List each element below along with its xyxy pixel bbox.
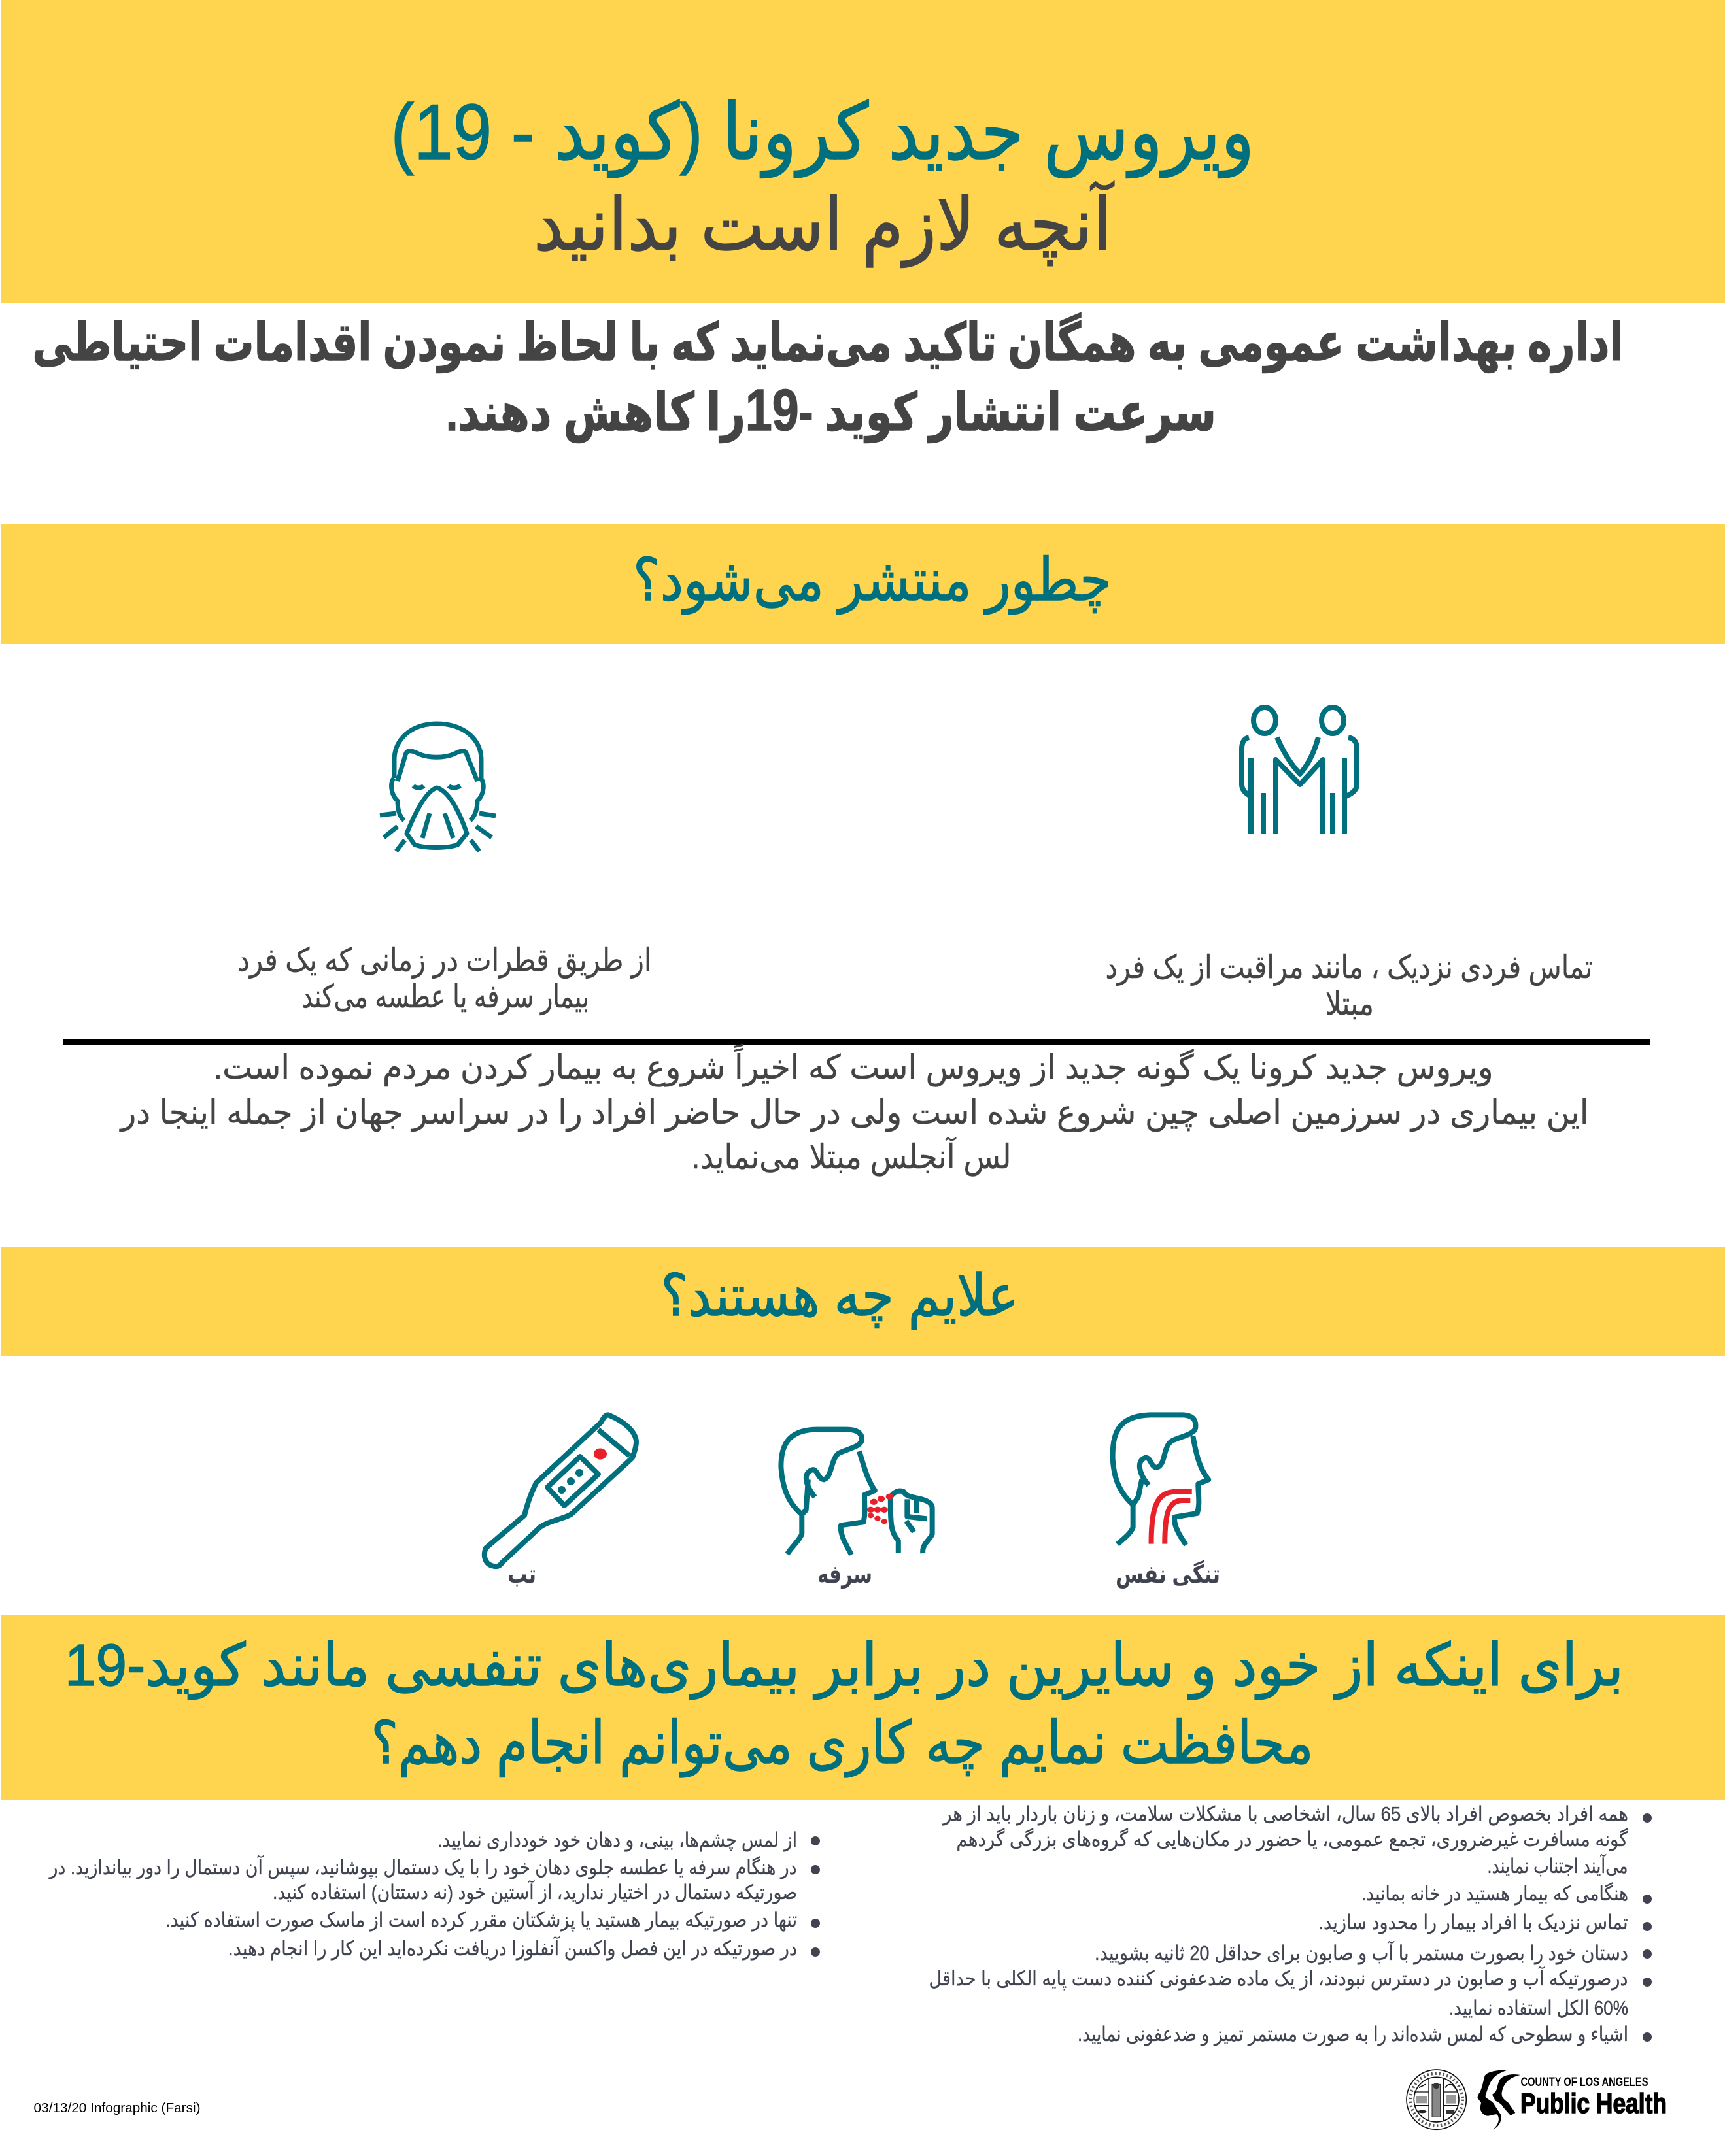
list: prevention tips right: تماس نزدیک با افراد بیمار را محدود سازید. (1318, 1911, 1628, 1934)
icon: thermometer (485, 1415, 636, 1566)
list: prevention tips right: هنگامی که بیمار هستید در خانه بمانید. (1361, 1882, 1628, 1906)
text block: about the virus: این بیماری در سرزمین اصلی چین شروع شده است ولی در حال حاضر افراد را در سراسر جهان از جمله اینجا در (119, 1094, 1588, 1132)
list: prevention tips left: از لمس چشم‌ها، بینی، و دهان خود خودداری نمایید. (437, 1828, 797, 1852)
list: prevention tips left: در هنگام سرفه یا عطسه جلوی دهان خود را با یک دستمال بپوشانید، سپس آن دستمال را دور بیاندازید. در (48, 1855, 797, 1879)
list: prevention tips left: در صورتیکه در این فصل واکسن آنفلوزا دریافت نکرده‌اید این کار را انجام دهید. (228, 1936, 797, 1961)
logo: wordmark (1520, 2076, 1667, 2119)
list: prevention tips right: گونه مسافرت غیرضروری، تجمع عمومی، یا حضور در مکان‌هایی که گروه‌های بزرگی گردهم (956, 1828, 1628, 1851)
list: prevention tips left: صورتیکه دستمال در اختیار ندارید، از آستین خود (نه دستتان) استفاده کنید. (273, 1879, 797, 1904)
list: prevention tips right: دستان خود را بصورت مستمر با آب و صابون برای حداقل 20 ثانیه بشویید. (1095, 1940, 1628, 1965)
panel: how does it spread heading: چطور منتشر می‌شود؟ (633, 548, 1112, 615)
caption: droplets: از طریق قطرات در زمانی که یک فرد (238, 943, 651, 979)
panel: how to protect heading: برای اینکه از خود و سایرین در برابر بیماری‌های تنفسی مانند کوید-19 (65, 1633, 1624, 1700)
footer date note: 03/13/20 Infographic (Farsi) (34, 2101, 200, 2115)
panel: symptoms heading: علایم چه هستند؟ (660, 1263, 1019, 1329)
icon: person coughing (781, 1430, 932, 1555)
label: cough: سرفه (817, 1561, 872, 1589)
list: prevention tips right: اشیاء و سطوحی که لمس شده‌اند را به صورت مستمر تمیز و ضدعفونی نمایید. (1078, 2023, 1628, 2046)
logo: wordmark: Public Health (1520, 2088, 1667, 2119)
list: prevention tips left: تنها در صورتیکه بیمار هستید یا پزشکتان مقرر کرده است از ماسک صورت استفاده کنید. (165, 1908, 797, 1932)
caption: close contact: مبتلا (1325, 986, 1374, 1022)
text block: about the virus: ویروس جدید کرونا یک گونه جدید از ویروس است که اخیراً شروع به بیمار کردن مردم نموده است. (213, 1043, 1494, 1087)
lead statement (33, 312, 1623, 443)
list: prevention tips left (48, 1828, 820, 1961)
logo: silhouette (1478, 2070, 1520, 2129)
logo: county seal (1407, 2070, 1466, 2129)
list: prevention tips right: می‌آیند اجتناب نمایند. (1487, 1853, 1628, 1878)
panel: title banner (1, 0, 1725, 303)
caption: close contact: تماس فردی نزدیک ، مانند مراقبت از یک فرد (1105, 950, 1593, 986)
panel: how to protect heading (1, 1615, 1725, 1800)
panel: how does it spread heading (1, 524, 1725, 644)
logo: wordmark: COUNTY OF LOS ANGELES (1521, 2076, 1648, 2089)
title line 2: آنچه لازم است بدانید (534, 180, 1115, 267)
label: fever: تب (507, 1561, 536, 1589)
caption: close contact (1105, 950, 1593, 1022)
icon: person sneezing with mask (380, 724, 496, 851)
caption: droplets: بیمار سرفه یا عطسه می‌کند (301, 979, 589, 1015)
icon: person short of breath (1113, 1415, 1208, 1545)
panel: how to protect heading: محافظت نمایم چه کاری می‌توانم انجام دهم؟ (371, 1711, 1313, 1777)
icon: two people holding hands (1242, 707, 1357, 834)
panel: symptoms heading (1, 1247, 1725, 1356)
divider rule (63, 1039, 1650, 1045)
text block: about the virus (119, 1043, 1588, 1176)
list: prevention tips right (929, 1802, 1652, 2046)
lead statement: سرعت انتشار کوید -19را کاهش دهند. (446, 378, 1216, 443)
list: prevention tips right: 60% الکل استفاده نمایید. (1449, 1996, 1628, 2019)
label: shortness of breath: تنگی نفس (1116, 1560, 1220, 1589)
caption: droplets (238, 943, 651, 1015)
list: prevention tips right: درصورتیکه آب و صابون در دسترس نبودند، از یک ماده ضدعفونی کننده دست پایه الکلی با حداقل (929, 1966, 1628, 1991)
list: prevention tips right: همه افراد بخصوص افراد بالای 65 سال، اشخاصی با مشکلات سلامت، و زنان باردار باید از هر (942, 1802, 1628, 1826)
title line 1: ویروس جدید کرونا (کوید - 19) (390, 88, 1254, 178)
text block: about the virus: لس آنجلس مبتلا می‌نماید. (692, 1137, 1011, 1176)
